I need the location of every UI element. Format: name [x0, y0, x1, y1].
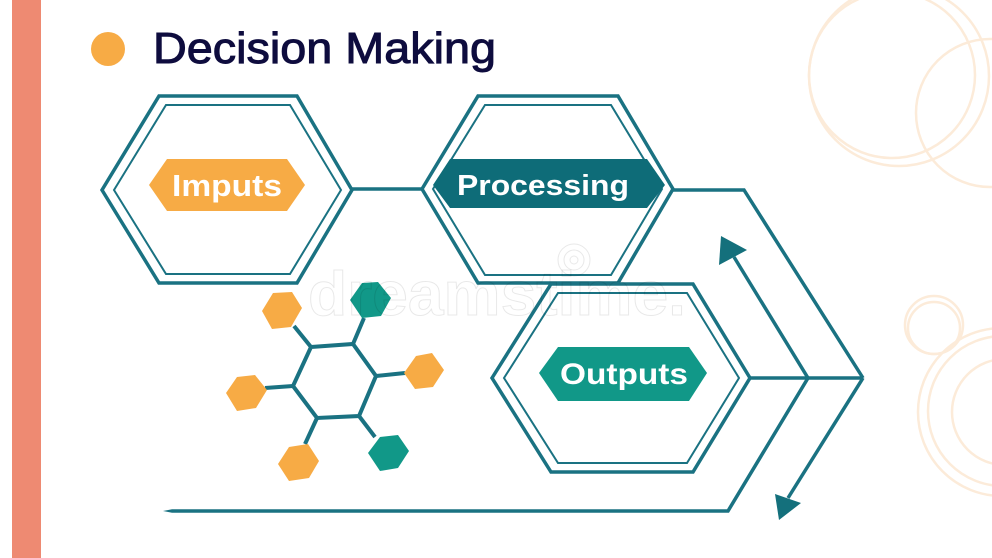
label: Processing: [433, 159, 665, 208]
label: Outputs: Outputs: [560, 358, 688, 391]
left accent bar: [12, 0, 41, 558]
network spokes: [265, 318, 405, 444]
node top-left: [262, 292, 302, 329]
arrow head down: [775, 494, 801, 520]
label: Imputs: Imputs: [172, 168, 282, 203]
hexagon network diagram: [226, 282, 444, 481]
decorative circles bottom right: [905, 296, 992, 496]
node top-right: [350, 282, 391, 318]
network center hexagon: [293, 344, 376, 418]
node bottom-left: [278, 444, 319, 481]
label: Processing: Processing: [457, 170, 629, 202]
watermark: dreamstime.: [308, 260, 686, 329]
label: Imputs: [149, 159, 305, 211]
label: Outputs: [539, 347, 707, 401]
node bottom-right: [368, 435, 409, 471]
hexagon: inputs: [102, 96, 352, 283]
arrow tail: [163, 509, 172, 513]
decorative circles top right: [809, 0, 992, 187]
hexagon: outputs: [492, 284, 750, 472]
hexagon: processing: [422, 96, 673, 283]
title bullet: [91, 32, 125, 66]
connectors: [172, 189, 863, 511]
node right: [404, 353, 444, 389]
arrow head up: [719, 236, 747, 265]
node left: [226, 375, 267, 411]
title: Decision Making: [153, 24, 496, 73]
